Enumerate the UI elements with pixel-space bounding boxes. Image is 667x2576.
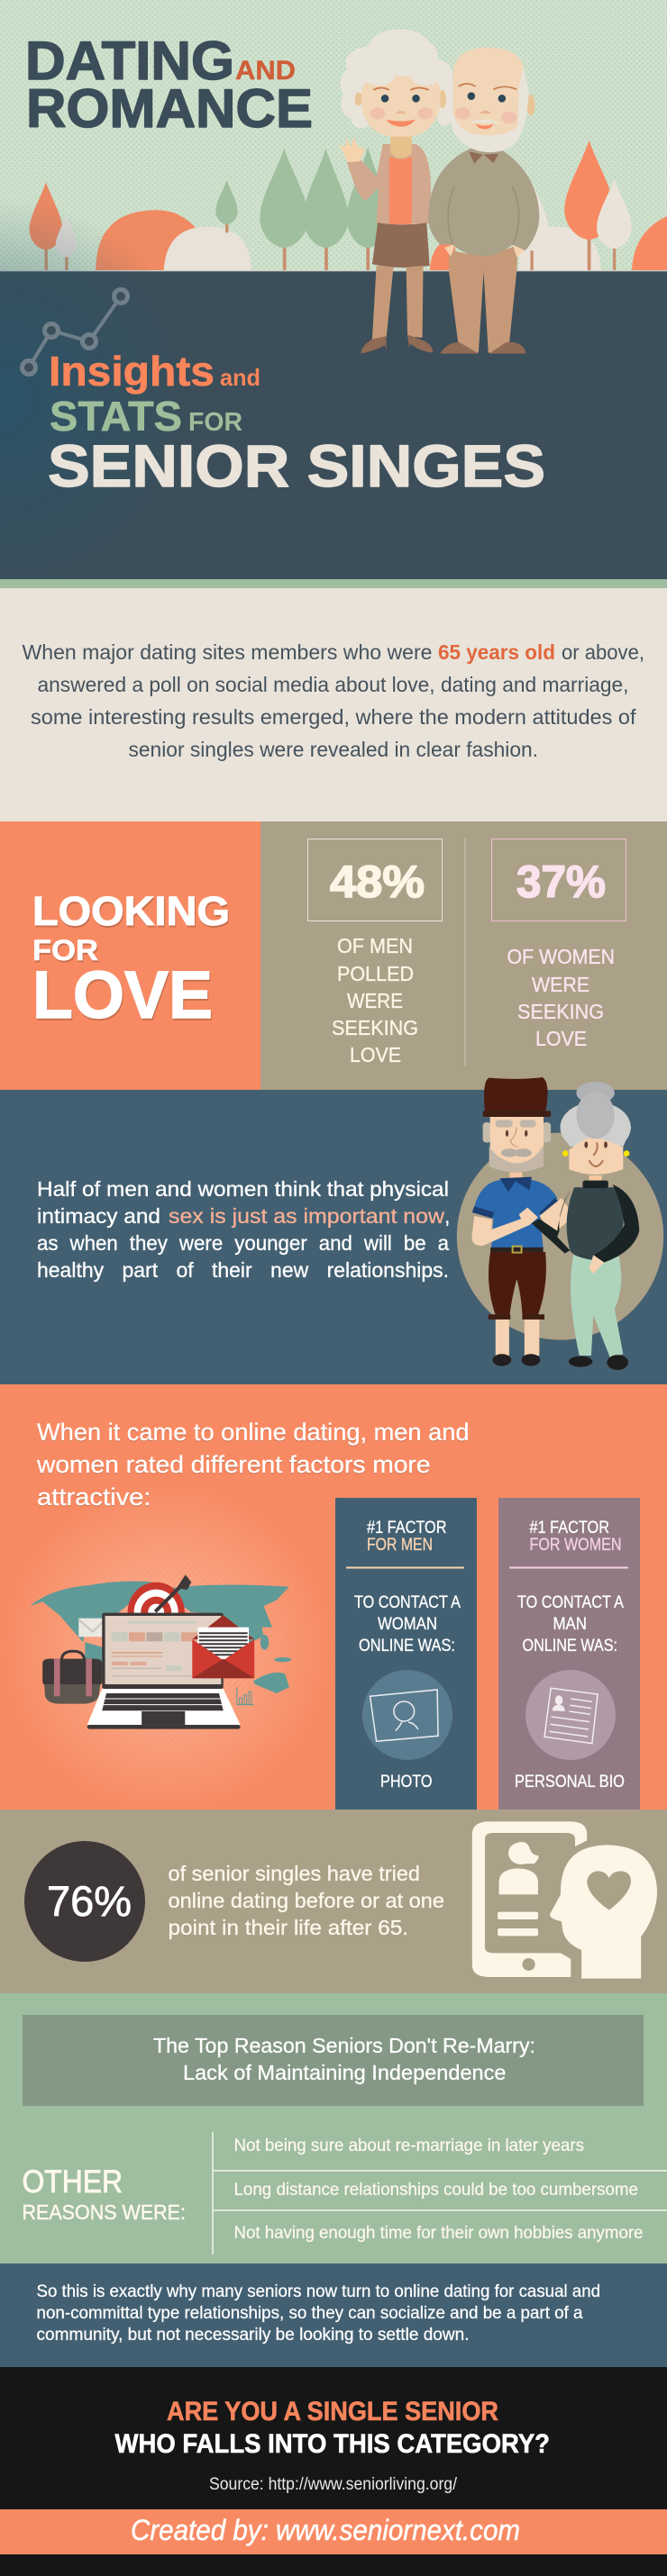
stat: women 37 percent: SEEKING (517, 1000, 604, 1023)
icon: phone and head with heart (472, 1821, 657, 1979)
intimacy text: as when they were younger and will be a (37, 1231, 449, 1255)
intro text: or above, (562, 640, 644, 664)
online dating text: attractive: (37, 1483, 151, 1510)
list of other reasons: Not having enough time for their own hobbies anymore (234, 2224, 644, 2243)
panel: factor for men: WOMAN (378, 1615, 437, 1634)
panel: intro (0, 588, 667, 821)
title: dating and romance: DATING (25, 31, 234, 91)
heading: looking for love: LOOKING (32, 888, 230, 934)
stat: men 48 percent: POLLED (337, 962, 414, 985)
intimacy text: healthy part of their new relationships. (37, 1258, 449, 1282)
stat: men 48 percent (308, 839, 442, 1066)
panel: online dating conclusion: So this is exactly why many seniors now turn to online dating for casual and (36, 2282, 600, 2301)
title: dating and romance (25, 31, 313, 139)
callout: top reason (23, 2015, 644, 2106)
heading: looking for love: FOR (32, 934, 98, 966)
online dating text: When it came to online dating, men and (37, 1419, 469, 1446)
panel: physical intimacy (0, 1077, 667, 1384)
green band (0, 579, 667, 588)
stat: women 37 percent: WERE (532, 973, 589, 996)
title: dating and romance: AND (235, 56, 296, 86)
stat: men 48 percent: SEEKING (332, 1016, 418, 1039)
title panel background (0, 271, 667, 579)
stat text: online dating before or at one (168, 1889, 444, 1912)
heading: looking for love: LOVE (32, 957, 213, 1032)
list of other reasons (234, 2136, 644, 2243)
intro text: When major dating sites members who were (22, 640, 433, 664)
woman (339, 29, 455, 354)
panel: factor for men: TO CONTACT A (354, 1593, 461, 1612)
panel: online dating factors (0, 1384, 667, 1815)
source: Source: http://www.seniorliving.org/ (209, 2475, 458, 2494)
online dating text: women rated different factors more (36, 1451, 430, 1478)
heading: insights and stats for senior singes: Insights (49, 348, 215, 395)
panel: factor for men: #1 FACTOR (367, 1519, 447, 1537)
heading: insights and stats for senior singes (48, 348, 545, 499)
left corner vignette (0, 198, 207, 579)
callout: top reason: Lack of Maintaining Independence (183, 2061, 507, 2084)
panel: factor for women: #1 FACTOR (530, 1519, 609, 1537)
intimacy text: Half of men and women think that physical (37, 1177, 449, 1201)
panel: factor for women: MAN (553, 1615, 587, 1634)
icon: chart line (22, 290, 128, 375)
stat: women 37 percent: OF WOMEN (507, 945, 615, 968)
stat: men 48 percent: WERE (347, 989, 403, 1012)
man (428, 48, 539, 354)
small envelope (78, 1619, 105, 1637)
bag (42, 1651, 102, 1704)
stat text: point in their life after 65. (168, 1916, 408, 1939)
intro text: senior singles were revealed in clear fashion. (128, 738, 538, 761)
panel: seeking love stats (260, 821, 667, 1090)
panel: reasons (0, 1993, 667, 2263)
online dating text (36, 1419, 470, 1510)
stat: women 37 percent: LOVE (535, 1027, 587, 1050)
panel: factor for women (498, 1498, 640, 1810)
panel: online dating conclusion: community, but not necessarily be looking to settle down. (36, 2326, 469, 2345)
red envelope (192, 1615, 254, 1678)
title: dating and romance: ROMANCE (26, 78, 313, 139)
panel: online dating conclusion (0, 2263, 667, 2367)
heading: insights and stats for senior singes: STATS (50, 393, 182, 440)
mini bar chart (237, 1687, 254, 1705)
man with hat (471, 1077, 574, 1366)
question heading (115, 2397, 550, 2459)
intro text: some interesting results emerged, where the modern attitudes of (31, 705, 636, 729)
panel: factor for women: ONLINE WAS: (523, 1637, 617, 1655)
woman with bun (532, 1082, 639, 1370)
heading: insights and stats for senior singes: FOR (188, 408, 242, 437)
intro text (22, 640, 644, 761)
heading: other reasons: OTHER (22, 2164, 123, 2200)
stat circle: 76% (47, 1877, 132, 1925)
illustration: couple holding hands (457, 1077, 663, 1370)
question heading: WHO FALLS INTO THIS CATEGORY? (115, 2429, 550, 2459)
heading: looking for love (32, 888, 230, 1032)
panel: factor for women: TO CONTACT A (517, 1593, 624, 1612)
stat: women 37 percent (492, 839, 626, 1050)
list of other reasons: Long distance relationships could be too cumbersome (234, 2181, 638, 2200)
heading: insights and stats for senior singes: and (220, 364, 260, 391)
intro text: answered a poll on social media about love, dating and marriage, (38, 673, 629, 696)
heading: other reasons: REASONS WERE: (22, 2200, 186, 2224)
icon: personal bio (525, 1670, 616, 1760)
list of other reasons: Not being sure about re-marriage in later years (234, 2136, 584, 2155)
illustration: laptop, map, target and mail (30, 1574, 291, 1729)
stat: men 48 percent: LOVE (350, 1043, 401, 1066)
panel: factor for women: FOR WOMEN (530, 1536, 622, 1555)
panel: 76 percent stat (0, 1810, 667, 1993)
halftone glow (23, 1505, 310, 1791)
callout: top reason: The Top Reason Seniors Don't Re-Marry: (153, 2034, 535, 2057)
panel: factor for women: PERSONAL BIO (515, 1773, 625, 1791)
heading: insights and stats for senior singes: SENIOR SINGES (48, 432, 545, 499)
panel: closing call to action (0, 2367, 667, 2576)
stat text: of senior singles have tried (168, 1862, 420, 1885)
question heading: ARE YOU A SINGLE SENIOR (167, 2397, 498, 2426)
credit band: Created by: www.seniornext.com (131, 2514, 520, 2546)
laptop (87, 1613, 241, 1729)
panel: factor for men: FOR MEN (367, 1536, 433, 1555)
panel: factor for men: ONLINE WAS: (359, 1637, 455, 1655)
stat circle (24, 1841, 145, 1962)
heading: other reasons (22, 2164, 186, 2224)
stat: men 48 percent: 48% (330, 857, 425, 907)
stat: men 48 percent: OF MEN (337, 934, 413, 957)
credit band (0, 2509, 667, 2554)
intimacy text: intimacy and (37, 1204, 160, 1228)
landscape: trees and hills (0, 141, 667, 271)
header scene background (0, 0, 667, 271)
panel: online dating conclusion: non-committal type relationships, so they can socialize and be a part of a (36, 2304, 583, 2323)
target and arrow (128, 1574, 191, 1642)
intimacy text: sex is just as important now (169, 1204, 444, 1228)
intro text: 65 years old (438, 640, 555, 664)
stat text (168, 1862, 444, 1939)
intimacy text: , (444, 1204, 450, 1228)
panel: factor for men (335, 1498, 477, 1810)
intimacy text (37, 1177, 450, 1282)
panel: looking for love (0, 821, 260, 1090)
icon: photo (362, 1670, 452, 1760)
world map (30, 1582, 291, 1693)
panel: factor for men: PHOTO (380, 1773, 433, 1791)
illustration: elderly couple standing (339, 29, 539, 354)
stat: women 37 percent: 37% (516, 857, 606, 907)
